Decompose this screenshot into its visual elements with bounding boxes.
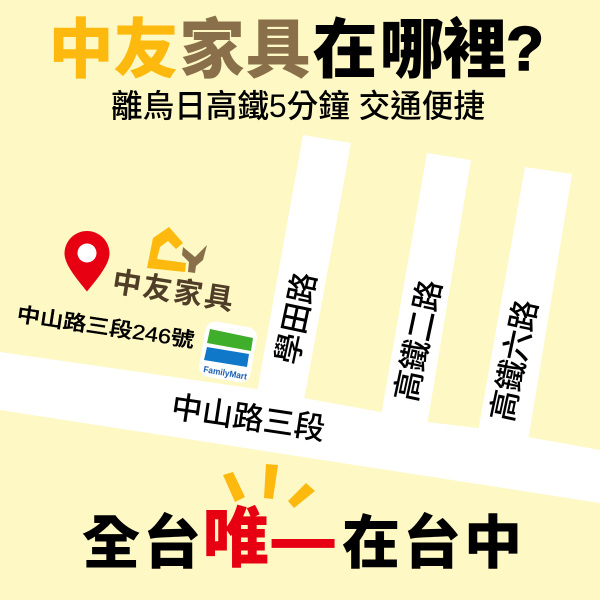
title: 中 (48, 13, 114, 86)
sparkle accent (223, 464, 315, 508)
road label: 高鐵六路: 高鐵六路 (485, 297, 544, 424)
road label: 中山路三段: 中山路三段 (169, 389, 327, 447)
subtitle: 離烏日高鐵5分鐘 交通便捷 (111, 88, 485, 124)
address: 中山路三段246號 (15, 303, 196, 352)
slogan: 一 (269, 509, 337, 585)
logo icon: house (147, 227, 186, 272)
slogan: 中 (464, 511, 522, 576)
road: 中山路三段 (0, 352, 600, 503)
slogan (82, 501, 522, 585)
road: 學田路 (257, 135, 351, 400)
title: ? (506, 15, 544, 84)
road label: 高鐵二路: 高鐵二路 (389, 277, 448, 404)
icon: FamilyMart (198, 320, 258, 384)
title: 在 (312, 13, 378, 86)
slogan: 台 (143, 511, 201, 576)
road: 高鐵二路 (381, 153, 471, 426)
title: 具 (245, 13, 311, 86)
title: 哪 (379, 13, 445, 86)
logo icon: Y (182, 245, 207, 273)
slogan: 全 (82, 511, 140, 576)
title: 裡 (442, 13, 508, 86)
logo: 中友家具 (110, 227, 236, 317)
title (48, 13, 544, 86)
title: 家 (179, 13, 245, 86)
slogan: 唯 (203, 501, 269, 575)
road: 高鐵六路 (478, 167, 572, 441)
slogan: 在 (342, 511, 400, 576)
title: 友 (113, 13, 179, 86)
slogan: 台 (403, 511, 461, 576)
logo wordmark: 中友家具 (110, 265, 236, 317)
road label: 學田路: 學田路 (270, 269, 323, 367)
icon: map pin (64, 231, 110, 292)
FamilyMart wordmark: FamilyMart (203, 364, 248, 382)
